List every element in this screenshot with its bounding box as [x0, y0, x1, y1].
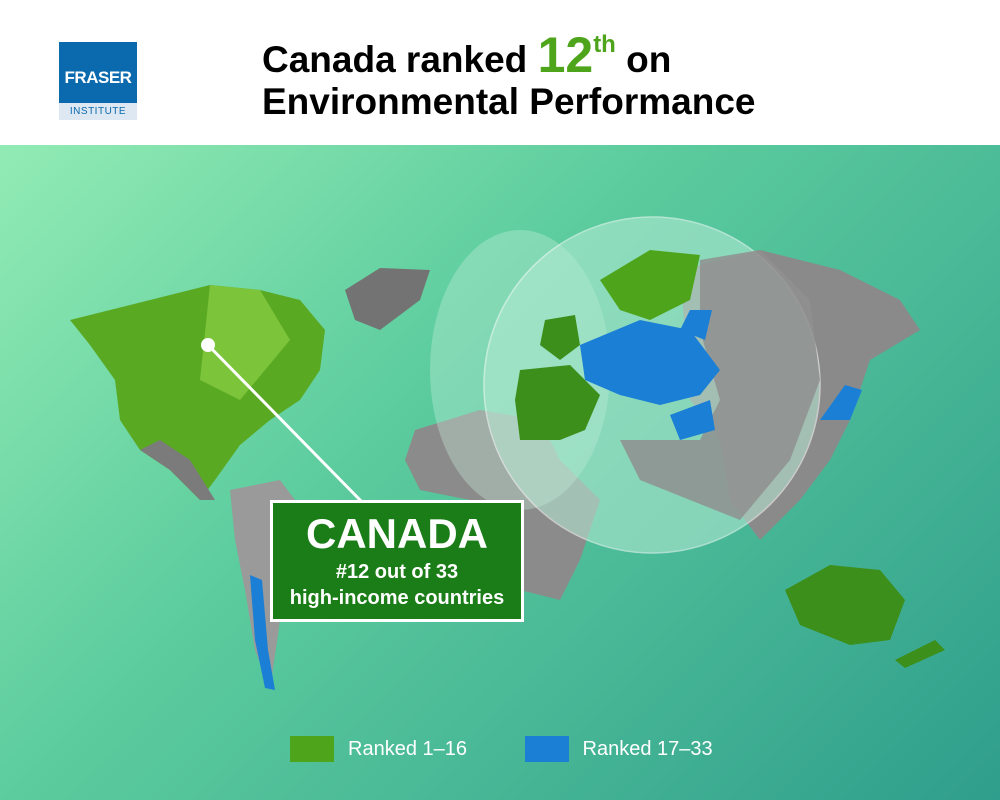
callout: Canada [270, 500, 524, 622]
legend: Ranked 1–16 Ranked 17–33 [348, 738, 713, 760]
Greenland [345, 268, 430, 330]
Australia [785, 565, 945, 668]
callout: Canada: CANADA [306, 510, 488, 557]
North America [70, 285, 325, 500]
Japan [820, 385, 862, 420]
logo: FRASER [65, 68, 131, 87]
pointer line [201, 338, 362, 502]
callout: Canada: high-income countries [290, 587, 504, 609]
Africa [405, 410, 600, 600]
Europe zoom circle [430, 217, 820, 553]
callout: Canada: #12 out of 33 [336, 561, 458, 583]
title: Environmental Performance [262, 81, 755, 122]
logo [59, 42, 137, 120]
logo: INSTITUTE [70, 106, 126, 117]
title: Canada ranked 12th on [262, 27, 671, 83]
title [262, 27, 755, 122]
Asia [680, 250, 920, 540]
South America [230, 480, 310, 690]
